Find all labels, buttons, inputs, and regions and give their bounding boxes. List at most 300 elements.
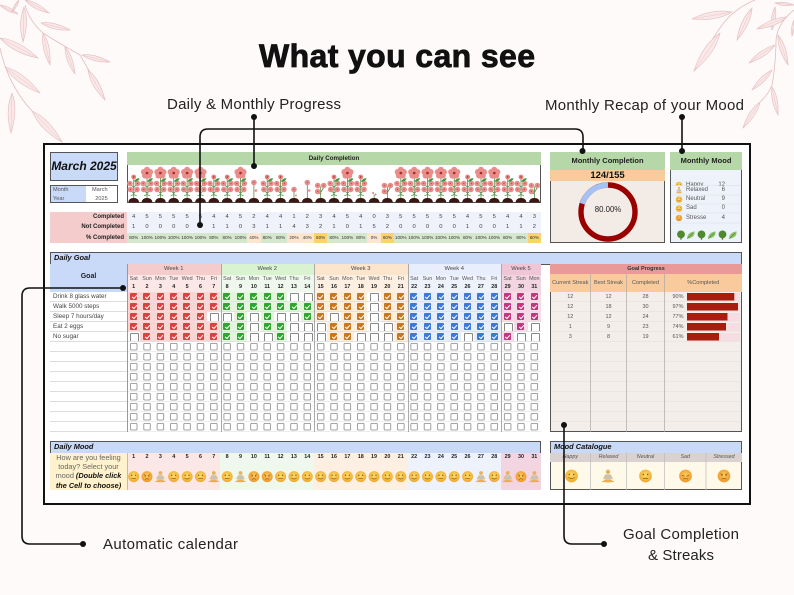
panel: completion stats table: 1 xyxy=(359,224,362,230)
panel: completion stats table: 1 xyxy=(226,224,229,230)
panel: completion stats table: 3 xyxy=(533,214,536,220)
progress row: eggs: 1 xyxy=(569,324,572,330)
progress row: no sugar: 61% xyxy=(672,334,684,340)
month and year selector xyxy=(50,185,118,203)
mood date numbers: 1 xyxy=(132,454,135,460)
panel: completion stats table: 5 xyxy=(185,214,189,220)
day names xyxy=(128,275,541,283)
panel: completion stats table: 2 xyxy=(386,224,389,230)
donut chart: 80.00% xyxy=(595,205,621,214)
panel: completion stats table: 1 xyxy=(212,224,215,230)
catalogue emoji icons xyxy=(565,453,730,490)
day names: Sat xyxy=(317,276,325,282)
panel: completion stats table: 4 xyxy=(279,214,282,220)
month title box xyxy=(50,152,118,181)
day names: Mon xyxy=(249,276,259,282)
goal labels: Drink 8 glass water xyxy=(53,293,107,300)
panel: completion stats table: 100% xyxy=(475,235,487,240)
day names: Fri xyxy=(304,276,310,282)
panel: completion stats table: 0 xyxy=(493,224,496,230)
date numbers: 29 xyxy=(505,284,511,290)
panel: completion stats table: 1 xyxy=(279,224,282,230)
panel: completion stats table: 2 xyxy=(252,214,255,220)
mood name headers: Sad xyxy=(680,454,690,460)
mood date numbers: 26 xyxy=(465,454,471,460)
dashboard frame xyxy=(43,143,751,505)
panel: completion stats table: 80% xyxy=(263,235,272,240)
date numbers: 10 xyxy=(251,284,257,290)
date numbers: 14 xyxy=(304,284,310,290)
progress row: sleep: 77% xyxy=(672,314,684,320)
panel: completion stats table: 0 xyxy=(372,214,376,220)
checkbox row: walk xyxy=(128,302,541,312)
panel: monthly completion xyxy=(550,152,665,243)
progress row: walk: 30 xyxy=(642,304,649,310)
leaves top left xyxy=(0,0,111,145)
day names: Tue xyxy=(450,276,459,282)
mood name headers xyxy=(550,453,742,462)
panel: completion stats table: 100% xyxy=(435,235,447,240)
mood date numbers: 17 xyxy=(344,454,350,460)
progress row: eggs xyxy=(569,324,684,330)
mood date numbers: 9 xyxy=(239,454,242,460)
mood summary rows: 6 xyxy=(722,186,725,192)
mood date numbers: 23 xyxy=(424,454,430,460)
panel: completion stats table: 80% xyxy=(276,235,285,240)
panel: completion stats table: 5 xyxy=(172,214,175,220)
date numbers: 16 xyxy=(331,284,337,290)
mood summary rows: Neutral xyxy=(686,196,705,202)
day names: Wed xyxy=(182,276,193,282)
panel: completion stats table: 0 xyxy=(159,224,162,230)
date numbers: 1 xyxy=(132,284,135,290)
panel: completion stats table: 80% xyxy=(356,235,365,240)
panel: completion stats table: 80% xyxy=(503,235,512,240)
progress row: eggs: 74% xyxy=(672,324,684,330)
panel: daily mood table xyxy=(50,453,541,490)
mood date numbers: 5 xyxy=(186,454,189,460)
panel: completion stats table: 0 xyxy=(199,224,202,230)
progress row: no sugar: 19 xyxy=(642,334,649,340)
day names: Wed xyxy=(275,276,286,282)
panel: completion stats table: 4 xyxy=(292,224,296,230)
mood date numbers: 7 xyxy=(212,454,215,460)
panel: mood catalogue xyxy=(550,453,742,490)
progress row: walk: 18 xyxy=(605,304,612,310)
progress column headers: Current Streak xyxy=(552,280,588,286)
panel: completion stats table: 100% xyxy=(408,235,420,240)
panel: completion stats table: 5 xyxy=(145,214,149,220)
date numbers: 30 xyxy=(518,284,524,290)
day names: Tue xyxy=(263,276,272,282)
panel: completion stats table: 100% xyxy=(488,235,500,240)
panel: completion stats table: 4 xyxy=(332,214,336,220)
panel: completion stats table: Completed xyxy=(93,214,124,220)
date numbers: 31 xyxy=(531,284,537,290)
mood date numbers: 28 xyxy=(491,454,497,460)
panel: monthly mood xyxy=(670,152,742,243)
day names: Sat xyxy=(410,276,418,282)
mood date numbers: 18 xyxy=(358,454,364,460)
flower row chart xyxy=(127,166,540,202)
date numbers: 7 xyxy=(212,284,215,290)
date numbers: 5 xyxy=(186,284,189,290)
panel: completion stats table: 5 xyxy=(479,214,483,220)
panel: completion stats table: 5 xyxy=(399,214,402,220)
panel: completion stats table: 4 xyxy=(466,214,469,220)
day names: Mon xyxy=(342,276,353,282)
panel: completion stats table: 3 xyxy=(252,224,255,230)
day names: Fri xyxy=(398,276,404,282)
panel: monthly completion: Monthly Completion xyxy=(571,156,644,165)
mood summary rows: Relaxed xyxy=(686,186,708,192)
day names: Mon xyxy=(436,276,446,282)
date numbers: 21 xyxy=(398,284,404,290)
progress row: eggs: 9 xyxy=(607,324,610,330)
mood prompt xyxy=(50,453,127,490)
progress row: sleep: 12 xyxy=(567,314,573,320)
date numbers: 8 xyxy=(226,284,229,290)
mood date numbers: 3 xyxy=(159,454,162,460)
date numbers: 13 xyxy=(291,284,297,290)
panel: completion stats table: 0 xyxy=(172,224,175,230)
panel: daily goal table xyxy=(50,264,541,432)
day names: Wed xyxy=(369,276,380,282)
date numbers: 9 xyxy=(239,284,242,290)
callout: daily and monthly progress: Daily & Monthly Progress xyxy=(167,96,341,113)
day names: Wed xyxy=(462,276,473,282)
panel: completion stats table: 100% xyxy=(168,235,180,240)
mood date numbers: 10 xyxy=(251,454,257,460)
progress column headers: %Completed xyxy=(687,280,719,286)
panel: completion stats table: 100% xyxy=(181,235,193,240)
progress row: drink water: 90% xyxy=(672,294,684,300)
date numbers: 6 xyxy=(199,284,202,290)
title: What you can see xyxy=(259,38,535,74)
day names: Sat xyxy=(130,276,138,282)
panel: completion stats table: 5 xyxy=(493,214,496,220)
day names: Mon xyxy=(155,276,166,282)
panel: daily completion flowers xyxy=(127,152,541,203)
callout: daily and monthly progress xyxy=(167,96,586,228)
panel: completion stats table: 2 xyxy=(306,214,309,220)
panel: daily completion flowers: Daily Completion xyxy=(309,155,359,162)
date numbers: 27 xyxy=(478,284,484,290)
progress row: drink water xyxy=(567,294,684,300)
panel: completion stats table: 0 xyxy=(439,224,442,230)
checkbox row: no sugar xyxy=(128,332,541,342)
mood date numbers: 12 xyxy=(278,454,284,460)
progress row: drink water: 12 xyxy=(567,294,573,300)
date numbers: 3 xyxy=(159,284,162,290)
mood date numbers: 15 xyxy=(318,454,324,460)
date numbers: 23 xyxy=(424,284,430,290)
panel: completion stats table: 3 xyxy=(306,224,309,230)
panel: completion stats table: 0 xyxy=(453,224,456,230)
panel: completion stats table: 5 xyxy=(439,214,442,220)
day names: Thu xyxy=(196,276,205,282)
day names: Sun xyxy=(329,276,339,282)
progress column headers xyxy=(550,274,742,292)
panel: completion stats table: 60% xyxy=(383,235,392,240)
progress row: walk: 12 xyxy=(567,304,573,310)
mood date numbers xyxy=(128,453,541,462)
mood date numbers: 19 xyxy=(371,454,377,460)
day names: Sat xyxy=(504,276,512,282)
background leaves and title xyxy=(0,0,794,142)
day names: Sun xyxy=(142,276,152,282)
panel: completion stats table: Not Completed xyxy=(81,224,124,230)
mood date numbers: 16 xyxy=(331,454,337,460)
mood date numbers: 25 xyxy=(451,454,457,460)
panel: completion stats table: 1 xyxy=(266,224,269,230)
mood date numbers: 31 xyxy=(531,454,537,460)
mood summary rows: 0 xyxy=(722,204,725,210)
day names: Sun xyxy=(236,276,245,282)
donut chart xyxy=(578,182,638,242)
mood date numbers: 4 xyxy=(172,454,175,460)
date numbers xyxy=(128,283,541,292)
callout: goal completion and streaks: Goal Completion xyxy=(623,526,739,543)
panel: completion stats table: 4 xyxy=(359,214,362,220)
goal labels: Eat 2 eggs xyxy=(53,323,83,330)
panel: completion stats table: 4 xyxy=(519,214,523,220)
mood date numbers: 13 xyxy=(291,454,297,460)
panel: completion stats table: 1 xyxy=(132,224,135,230)
panel: completion stats table: 1 xyxy=(292,214,296,220)
clipped happy row xyxy=(686,182,725,186)
panel: completion stats table: 100% xyxy=(154,235,166,240)
daily mood heading: Daily Mood xyxy=(54,442,93,451)
panel: completion stats table: 20% xyxy=(289,235,299,240)
week headers: Week 4 xyxy=(444,266,464,272)
empty checkbox rows xyxy=(128,342,541,432)
mood date numbers: 11 xyxy=(264,454,270,460)
panel: completion stats table: 5 xyxy=(239,214,242,220)
month and year selector: Year xyxy=(53,196,64,202)
progress row: drink water: 28 xyxy=(642,294,649,300)
daily goal heading xyxy=(50,252,742,265)
panel: completion stats table: 80% xyxy=(209,235,218,240)
day names: Mon xyxy=(529,276,540,282)
callout: goal completion and streaks xyxy=(561,422,739,564)
panel: completion stats table: 0 xyxy=(426,224,429,230)
panel: completion stats table: 0 xyxy=(399,224,402,230)
day names: Sun xyxy=(516,276,526,282)
callout: automatic calendar: Automatic calendar xyxy=(103,536,238,553)
panel: completion stats table: 3 xyxy=(319,214,322,220)
mood date numbers: 22 xyxy=(411,454,417,460)
month and year selector: March ˙ xyxy=(92,187,111,193)
callout: automatic calendar xyxy=(22,285,238,553)
panel: completion stats table: 2 xyxy=(319,224,322,230)
progress row: eggs: 23 xyxy=(642,324,649,330)
week headers: Week 5 xyxy=(511,266,531,272)
day names: Fri xyxy=(491,276,497,282)
mood name headers: Neutral xyxy=(637,454,654,460)
mood date numbers: 8 xyxy=(226,454,229,460)
mood summary rows: Stresse xyxy=(686,214,706,220)
progress row: walk: 97% xyxy=(672,304,684,310)
checkbox row: sleep xyxy=(128,312,541,322)
mood icons and trees xyxy=(671,182,741,240)
panel: completion stats table: 5 xyxy=(346,214,349,220)
panel: completion stats table: 1 xyxy=(466,224,469,230)
date numbers: 25 xyxy=(451,284,457,290)
date numbers: 11 xyxy=(264,284,270,290)
panel: completion stats table: 4 xyxy=(506,214,509,220)
panel: completion stats table: 5 xyxy=(426,214,429,220)
progress row: no sugar xyxy=(569,334,684,340)
mood date numbers: 30 xyxy=(518,454,524,460)
panel: completion stats table: 100% xyxy=(195,235,206,240)
panel: completion stats table: 5 xyxy=(159,214,162,220)
panel: completion stats table: 0 xyxy=(239,224,242,230)
panel: goal progress xyxy=(550,264,742,432)
panel: completion stats table: 4 xyxy=(132,214,135,220)
mood emoji row xyxy=(128,471,540,482)
progress row: no sugar: 3 xyxy=(569,334,572,340)
panel: completion stats table: 1 xyxy=(519,224,523,230)
panel: completion stats table: 2 xyxy=(533,224,536,230)
leaves top right xyxy=(691,0,794,129)
panel: completion stats table: 40% xyxy=(303,235,312,240)
panel: completion stats table: 100% xyxy=(141,235,153,240)
date numbers: 19 xyxy=(371,284,377,290)
date numbers: 15 xyxy=(318,284,324,290)
panel: completion stats table: 4 xyxy=(266,214,269,220)
date numbers: 17 xyxy=(344,284,350,290)
panel: completion stats table: % Completed xyxy=(86,235,124,241)
mood date numbers: 20 xyxy=(384,454,390,460)
callout: monthly recap of mood xyxy=(545,97,744,154)
mood prompt: today? Select your xyxy=(58,462,119,471)
progress row: sleep: 24 xyxy=(642,314,649,320)
panel: completion stats table: 60% xyxy=(530,235,539,240)
panel: completion stats table: 0 xyxy=(346,224,349,230)
week headers: Week 3 xyxy=(351,266,371,272)
panel: completion stats table: 100% xyxy=(395,235,407,240)
panel: completion stats table: 1 xyxy=(332,224,336,230)
mood catalogue heading: Mood Catalogue xyxy=(554,442,611,451)
date numbers: 18 xyxy=(358,284,364,290)
day names: Fri xyxy=(211,276,217,282)
mood date numbers: 21 xyxy=(398,454,404,460)
panel: completion stats table: 80% xyxy=(329,235,339,240)
mood date numbers: 14 xyxy=(304,454,310,460)
progress row: sleep xyxy=(567,314,684,320)
panel: completion stats table: 60% xyxy=(316,235,325,240)
panel: completion stats table: 0% xyxy=(371,235,377,240)
panel: completion stats table: 3 xyxy=(386,214,389,220)
week headers xyxy=(128,264,541,275)
mood name headers: Stressed xyxy=(713,454,735,460)
mood cell tints xyxy=(128,462,541,490)
panel: completion stats table: 80% xyxy=(516,235,526,240)
mood prompt: How are you feeling xyxy=(56,453,121,462)
panel: completion stats table: 4 xyxy=(226,214,229,220)
mood date numbers: 2 xyxy=(146,454,149,460)
month and year selector: Month xyxy=(53,187,69,193)
day names: Sun xyxy=(423,276,432,282)
day names: Sat xyxy=(223,276,231,282)
date numbers: 12 xyxy=(278,284,284,290)
goal column header: Goal xyxy=(81,273,96,280)
panel: completion stats table: 0 xyxy=(185,224,189,230)
checkbox row: eggs xyxy=(128,322,541,332)
panel: completion stats table xyxy=(50,212,541,243)
panel: completion stats table: 100% xyxy=(422,235,433,240)
date numbers: 22 xyxy=(411,284,417,290)
day names: Thu xyxy=(476,276,486,282)
panel: completion stats table: 1 xyxy=(506,224,509,230)
mood prompt: the Cell to choose) xyxy=(56,481,121,490)
mood name headers: Relaxed xyxy=(599,454,618,460)
panel: completion stats table: 100% xyxy=(235,235,246,240)
date numbers: 4 xyxy=(172,284,175,290)
progress row: no sugar: 8 xyxy=(607,334,610,340)
mood name headers: Happy xyxy=(562,454,578,460)
progress bars xyxy=(590,274,740,432)
progress row: sleep: 12 xyxy=(605,314,612,320)
checkbox row: drink water xyxy=(128,292,541,302)
panel: completion stats table: 5 xyxy=(453,214,456,220)
mood summary rows xyxy=(686,186,725,220)
daily mood heading xyxy=(50,441,541,454)
panel: monthly completion: 124/155 xyxy=(590,170,625,181)
panel: completion stats table: 5 xyxy=(372,224,376,230)
progress column headers: Best Streak xyxy=(594,280,623,286)
mood summary rows: Sad xyxy=(686,204,697,210)
goal labels: No sugar xyxy=(53,333,79,340)
panel: completion stats table: 5 xyxy=(199,214,202,220)
goal column header xyxy=(50,264,127,292)
daily goal heading: Daily Goal xyxy=(54,253,90,262)
panel: completion stats table: 0 xyxy=(479,224,483,230)
week headers: Week 2 xyxy=(257,266,277,272)
mood date numbers: 29 xyxy=(505,454,511,460)
day names: Tue xyxy=(169,276,178,282)
panel: completion stats table: 0 xyxy=(145,224,149,230)
mood date numbers: 27 xyxy=(478,454,484,460)
date numbers: 28 xyxy=(491,284,497,290)
day names: Thu xyxy=(289,276,299,282)
panel: monthly mood: Monthly Mood xyxy=(681,156,731,165)
panel: completion stats table: 100% xyxy=(448,235,460,240)
panel: completion stats table: 100% xyxy=(341,235,353,240)
panel: completion stats table: 5 xyxy=(412,214,416,220)
day names: Thu xyxy=(383,276,392,282)
panel: completion stats table: 80% xyxy=(129,235,138,240)
panel: completion stats table: 0 xyxy=(412,224,416,230)
panel: goal progress: Goal Progress xyxy=(627,266,665,272)
panel: completion stats table: 4 xyxy=(212,214,215,220)
mood catalogue heading xyxy=(550,441,742,454)
progress row: drink water: 12 xyxy=(605,294,612,300)
date numbers: 20 xyxy=(384,284,390,290)
mood summary rows: 4 xyxy=(722,214,725,220)
month title box: March 2025 xyxy=(51,159,117,173)
callout: goal completion and streaks: & Streaks xyxy=(648,547,714,564)
progress column headers: Completed xyxy=(632,280,659,286)
goal labels: Walk 5000 steps xyxy=(53,303,99,310)
progress row: walk xyxy=(567,304,684,310)
mood date numbers: 24 xyxy=(438,454,444,460)
panel: completion stats table: 80% xyxy=(463,235,472,240)
panel: completion stats table: 80% xyxy=(223,235,232,240)
week headers: Week 1 xyxy=(164,266,184,272)
mood prompt: mood (Double click xyxy=(56,471,121,480)
